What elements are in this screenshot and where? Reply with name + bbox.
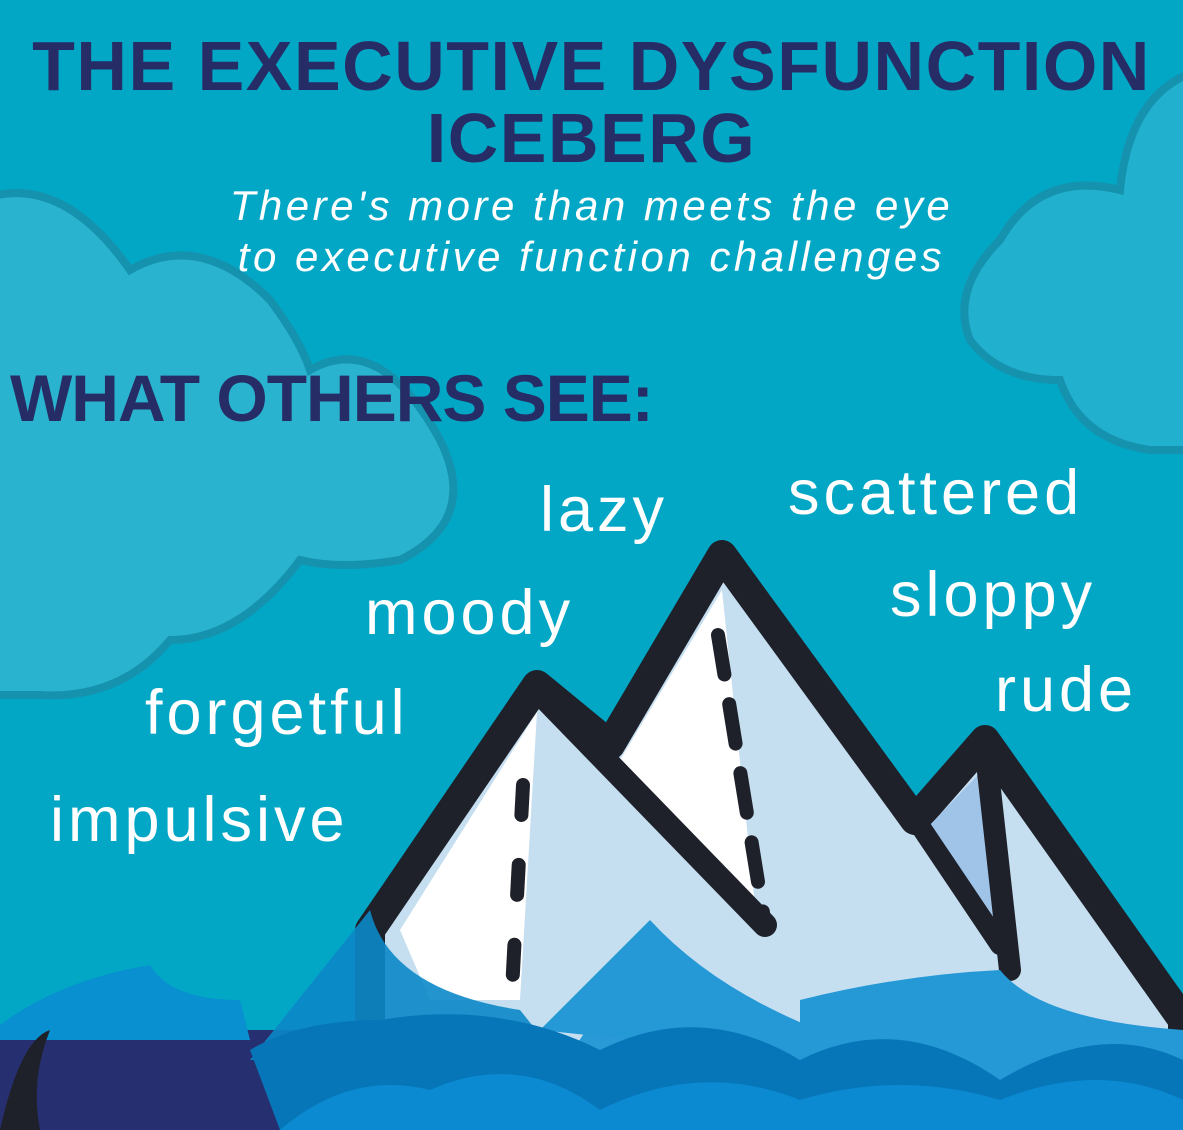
word: scattered: scattered	[788, 458, 1083, 528]
word: sloppy: sloppy	[890, 560, 1096, 630]
title: THE EXECUTIVE DYSFUNCTION	[32, 27, 1151, 105]
subtitle	[230, 182, 953, 280]
heading: what others see: WHAT OTHERS SEE:	[10, 361, 653, 435]
word: rude: rude	[995, 655, 1137, 725]
title	[32, 27, 1151, 177]
word: lazy: lazy	[540, 475, 668, 545]
word: impulsive: impulsive	[50, 785, 349, 855]
word: moody: moody	[365, 578, 574, 648]
waves	[0, 910, 1183, 1130]
word: forgetful: forgetful	[145, 678, 409, 748]
cloud left	[0, 193, 453, 695]
cloud right	[964, 70, 1183, 450]
subtitle: to executive function challenges	[238, 233, 945, 280]
iceberg	[370, 555, 1183, 1130]
subtitle: There's more than meets the eye	[230, 182, 953, 229]
title: ICEBERG	[427, 99, 756, 177]
